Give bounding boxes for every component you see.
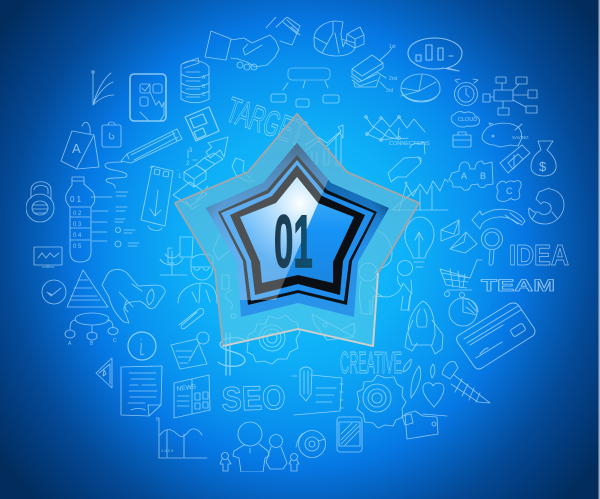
- star: inner blue face: [240, 177, 354, 283]
- doodle: note with pin: [171, 332, 209, 369]
- doodle: heart: [423, 383, 444, 407]
- doodle: bottle list lines: [91, 192, 139, 247]
- doodle: puzzle piece C: [497, 181, 521, 201]
- doodle: isometric blocks with arrow: [178, 137, 228, 187]
- doodle: banknote: [500, 145, 530, 173]
- doodle: database stack: B: [202, 84, 206, 90]
- doodle: alarm clock: [454, 79, 478, 106]
- doodle: money bag: [531, 141, 556, 176]
- doodle: numbered bottle: 0 2: [73, 211, 82, 217]
- doodle: check circle: [42, 280, 66, 304]
- doodle: database stack: [181, 58, 209, 103]
- doodle: envelopes: [441, 220, 477, 253]
- doodle: dollar sign: [218, 333, 246, 375]
- doodle: oval hierarchy: [65, 313, 118, 347]
- doodle: database stack: A: [202, 75, 206, 81]
- doodle: behind star panels: [168, 182, 392, 319]
- doodle: floppy disk: [185, 107, 219, 141]
- doodle: small pie: [449, 298, 478, 326]
- doodle: gear center: [247, 315, 300, 364]
- doodle: isometric blocks with arrow: 2: [186, 161, 190, 167]
- doodle: puzzle pieces A B: [449, 161, 493, 190]
- doodle: curved arrow: [472, 209, 525, 229]
- doodle: circular arrows: [529, 188, 564, 224]
- doodle: pie chart with slice: [314, 21, 364, 56]
- star: mid blue band: [221, 160, 374, 301]
- doodle: small bag: [102, 122, 121, 147]
- doodle: laptop: [312, 314, 355, 340]
- doodle: database stack: C: [202, 92, 206, 98]
- doodle: numbered bottle: 0 4: [73, 233, 82, 239]
- doodle: man with sunglasses: [178, 254, 217, 303]
- doodle: triangle tag: [96, 358, 112, 388]
- doodle: line chart: y: [156, 416, 159, 422]
- doodle: numbered bottle: 0 1: [70, 195, 82, 204]
- doodle: piggy bank: [482, 123, 529, 147]
- doodle: notebook with pencil: [292, 367, 343, 415]
- doodle: flow diagram: [271, 68, 339, 107]
- doodle: team lettering: TEAM: [481, 276, 555, 295]
- star: lighter lower edge highlight: [223, 273, 378, 346]
- star: translucent outer star: [175, 114, 419, 346]
- doodle: newspaper: [174, 375, 210, 418]
- doodle: connections network: [365, 116, 430, 147]
- doodle: newspaper: NEWS: [176, 383, 197, 393]
- doodle: flame drops: [403, 359, 435, 398]
- doodle: shopping bag A: A: [72, 141, 81, 156]
- doodle: pyramid: [67, 270, 108, 307]
- doodle: speech bubble: [408, 38, 462, 71]
- doodle: people shaking hands: [359, 260, 412, 314]
- star: outer black line: [218, 155, 377, 305]
- doodle: numbered bottle: [66, 177, 95, 262]
- right edge sliver: [598, 0, 600, 499]
- doodle: oval hierarchy: A: [68, 341, 72, 347]
- star badge: [175, 114, 419, 346]
- doodle: wallet with pen: [402, 411, 447, 439]
- doodle: usb stick: [141, 166, 173, 230]
- doodle: paperclip: [179, 308, 204, 329]
- doodle: connections network: CONNECTIONS: [389, 141, 430, 147]
- doodle: puzzle piece C: C: [506, 186, 513, 196]
- star: inner black ring: [230, 165, 365, 295]
- doodle: isometric blocks with arrow: 1: [178, 174, 182, 180]
- doodle: handshake: [205, 17, 300, 70]
- doodle: cloud: CLOUD: [458, 117, 477, 123]
- doodle: money bag: $: [539, 159, 547, 174]
- doodle: branching tree: [160, 251, 187, 275]
- doodle: cloud: [451, 112, 479, 127]
- doodle: family of people: [220, 422, 305, 472]
- doodle: shopping bag A: [61, 122, 99, 169]
- doodle: rocket: [405, 301, 443, 354]
- doodle: line chart: 1 2 3 4: [161, 448, 174, 453]
- doodle: padlock: [26, 182, 54, 222]
- doodle: org chart: [483, 77, 537, 115]
- doodle: eye circle: [298, 430, 326, 458]
- doodle: numbered bottle: 0 5: [73, 244, 82, 250]
- doodle: growth curves: [92, 71, 114, 105]
- doodle: stacked books: 1st: [389, 44, 396, 50]
- doodle: magnifier: [482, 228, 502, 265]
- doodle: smartphone: [337, 417, 362, 452]
- doodle: shopping cart: [440, 260, 482, 298]
- doodle: puzzle pieces A B: A: [461, 171, 467, 181]
- doodle: trend chart with key: [388, 142, 448, 211]
- doodle: striped tie: [442, 362, 490, 403]
- doodle: stacked books: 3rd: [386, 88, 393, 94]
- doodle: idea lettering: IDEA: [509, 240, 569, 272]
- doodle: paper clip in star: [178, 158, 255, 181]
- doodle: monitor chart: [34, 247, 62, 267]
- doodle: airplane: [102, 269, 165, 323]
- doodle: document: [121, 366, 162, 416]
- doodle: tablet with touch hand: [130, 74, 166, 121]
- doodle: pencil with squiggle: [105, 129, 182, 188]
- doodle: puzzle pieces A B: B: [480, 171, 486, 181]
- doodle: briefcase: [453, 132, 471, 147]
- doodle: oval hierarchy: C: [113, 338, 117, 344]
- doodle: SEO lettering: SEO: [221, 379, 286, 419]
- doodle: pie chart 3d: [401, 74, 440, 102]
- doodle: stacked books: [351, 44, 398, 94]
- doodle: credit card: [457, 303, 535, 369]
- doodle: line chart: [156, 416, 207, 458]
- doodle: numbered bottle: 0 3: [73, 222, 82, 228]
- doodle: piggy bank: SAVING: [512, 135, 529, 140]
- doodle: rising arrow chart: [305, 125, 343, 165]
- doodle: info circle: [128, 332, 156, 360]
- doodle: isometric blocks with arrow: 3: [189, 148, 193, 154]
- doodle: target text: TARGET: [221, 91, 310, 154]
- doodle ring: CREATIVE: [340, 345, 402, 380]
- doodle: stacked books: 2nd: [389, 76, 398, 82]
- star: band shading at tips: [206, 143, 389, 317]
- star: glass glare: [206, 143, 328, 300]
- star: number 01: 01: [274, 202, 313, 284]
- star: blue band: [206, 143, 389, 317]
- doodle: oval hierarchy: B: [90, 341, 94, 347]
- doodle: light bulb: [405, 217, 434, 267]
- doodle: gear right: [357, 375, 406, 428]
